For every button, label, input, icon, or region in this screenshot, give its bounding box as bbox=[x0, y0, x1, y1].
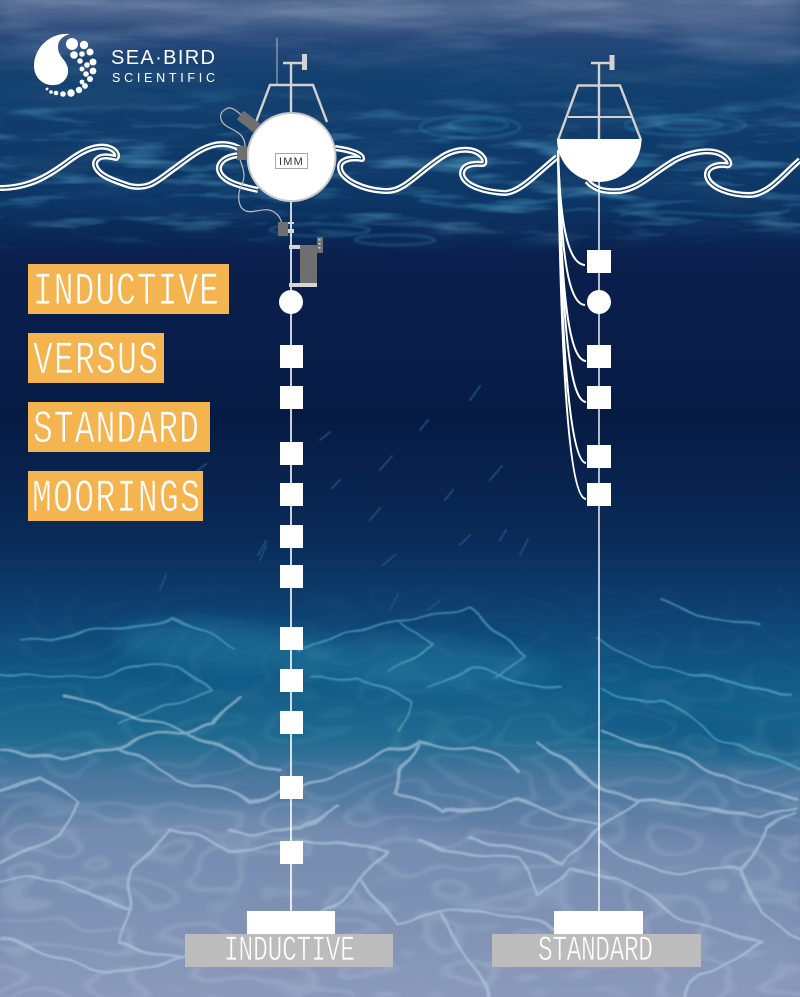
sensors on float bbox=[237, 111, 288, 236]
title line: MOORINGS: MOORINGS bbox=[32, 474, 200, 526]
title bbox=[28, 264, 229, 526]
label: STANDARD: STANDARD bbox=[538, 932, 653, 972]
anchor bbox=[554, 911, 643, 934]
title line: STANDARD: STANDARD bbox=[33, 405, 199, 457]
anchor bbox=[247, 911, 335, 934]
icon: logo drop and dots bbox=[34, 34, 96, 97]
logo wordmark: SEA·BIRD bbox=[111, 47, 215, 69]
buoy half float bbox=[557, 139, 642, 182]
buoy frame and mast bbox=[256, 54, 327, 122]
inductive instruments on line bbox=[279, 290, 303, 864]
standard mooring bbox=[492, 55, 701, 972]
antenna bbox=[276, 38, 278, 85]
logo wordmark: SCIENTIFIC bbox=[112, 71, 215, 85]
label: INDUCTIVE bbox=[185, 932, 393, 972]
mooring line bbox=[290, 200, 292, 911]
inductive cables bbox=[221, 108, 282, 224]
title line: VERSUS: VERSUS bbox=[33, 336, 158, 388]
sensor cables bbox=[558, 150, 586, 499]
IMM label: IMM bbox=[279, 156, 304, 168]
inline instrument bbox=[288, 222, 323, 287]
logo wordmark bbox=[111, 47, 215, 85]
mooring line bbox=[598, 180, 600, 911]
inductive mooring bbox=[185, 38, 393, 972]
title line: INDUCTIVE: INDUCTIVE bbox=[33, 267, 219, 319]
fish school bbox=[150, 386, 528, 610]
logo: Sea-Bird Scientific bbox=[34, 34, 215, 97]
label: STANDARD bbox=[492, 932, 701, 972]
waves bbox=[0, 144, 800, 195]
buoy frame and mast bbox=[558, 55, 641, 140]
label: INDUCTIVE: INDUCTIVE bbox=[224, 932, 355, 972]
buoy float bbox=[248, 113, 336, 201]
IMM label bbox=[276, 154, 308, 168]
standard instruments on line bbox=[587, 250, 611, 506]
